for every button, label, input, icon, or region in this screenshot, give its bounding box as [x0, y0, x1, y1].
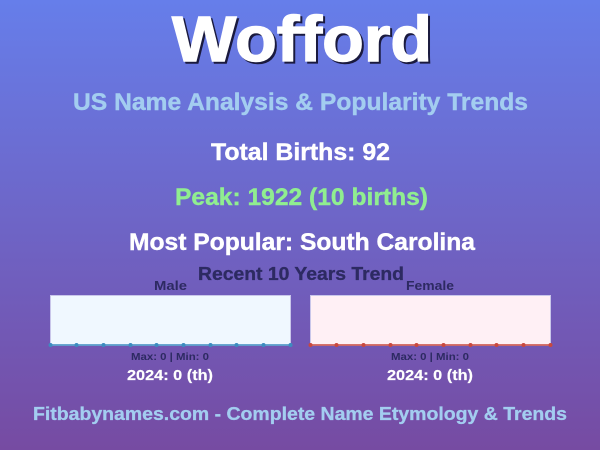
- male max and min: Max: 0 | Min: 0: [131, 351, 209, 363]
- male label: Male: [154, 279, 187, 293]
- peak year: Peak: 1922 (10 births): [175, 184, 428, 211]
- male chart: [48, 296, 292, 347]
- total births: Total Births: 92: [211, 139, 390, 166]
- subtitle: US Name Analysis & Popularity Trends: [73, 89, 528, 116]
- panel: male trend: [48, 279, 292, 384]
- title: Wofford: [172, 3, 432, 75]
- female max and min: Max: 0 | Min: 0: [391, 351, 469, 363]
- most popular state: Most Popular: South Carolina: [129, 229, 476, 256]
- panel: female trend: [308, 279, 552, 384]
- male 2024 value: 2024: 0 (th): [127, 367, 213, 384]
- female label: Female: [406, 279, 454, 293]
- title: Wofford: [174, 5, 434, 77]
- trend heading: Recent 10 Years Trend: [198, 264, 404, 284]
- female chart: [308, 296, 552, 347]
- footer: Fitbabynames.com - Complete Name Etymology & Trends: [33, 404, 567, 424]
- female 2024 value: 2024: 0 (th): [387, 367, 473, 384]
